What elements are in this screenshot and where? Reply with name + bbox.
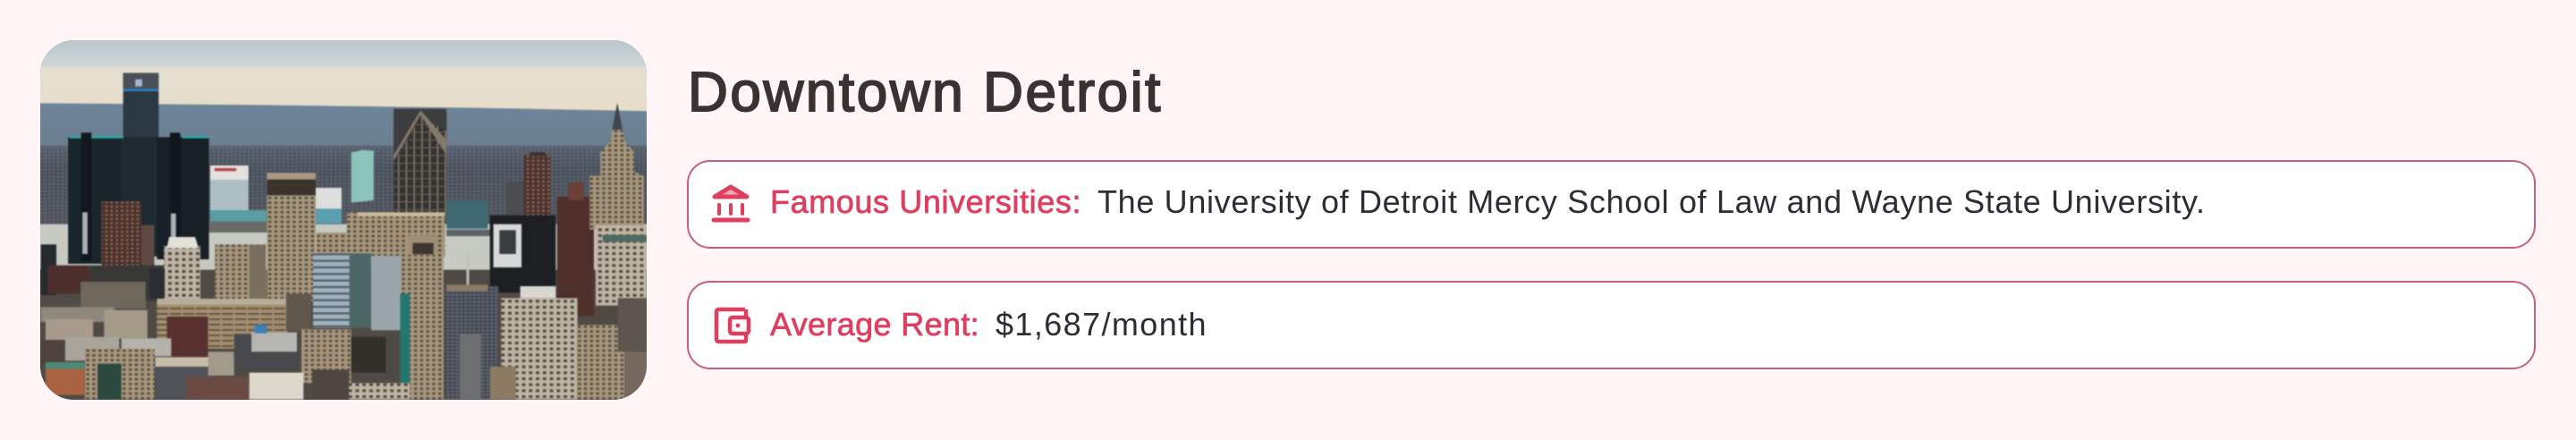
Penobscot tower xyxy=(589,103,644,230)
black billboard building xyxy=(490,216,555,292)
One Detroit Center style tower xyxy=(394,114,446,216)
street canyon xyxy=(445,286,498,400)
label: average rent: Average Rent: xyxy=(770,306,979,343)
dark red tower xyxy=(557,197,594,316)
blue office block xyxy=(295,253,314,298)
right foreground xyxy=(501,298,578,400)
red brick tower xyxy=(524,155,551,222)
heading: Downtown Detroit xyxy=(688,62,1163,123)
panel: famous universities xyxy=(687,160,2536,249)
distant land xyxy=(39,103,650,233)
low wide building xyxy=(347,212,445,257)
parking and mid foreground xyxy=(157,301,287,349)
sky xyxy=(39,38,650,119)
bottom foreground xyxy=(65,337,119,360)
tan tower xyxy=(267,173,316,301)
tall tan tower front xyxy=(401,241,444,400)
icon: wallet xyxy=(714,308,751,343)
text: rent value: $1,687/month xyxy=(996,306,1208,343)
text: universities value: The University of Detroit Mercy School of Law and Wayne State University. xyxy=(1097,183,2206,220)
foreground left: small towers xyxy=(101,201,141,275)
river xyxy=(39,224,650,275)
photo: Detroit skyline xyxy=(40,40,647,400)
casino and far towers xyxy=(210,165,249,221)
mid-ground mass xyxy=(39,270,650,401)
Renaissance Center xyxy=(68,73,209,264)
icon: university building xyxy=(712,184,750,222)
label: famous universities: Famous Universities: xyxy=(770,183,1081,220)
panel: average rent xyxy=(687,281,2536,369)
